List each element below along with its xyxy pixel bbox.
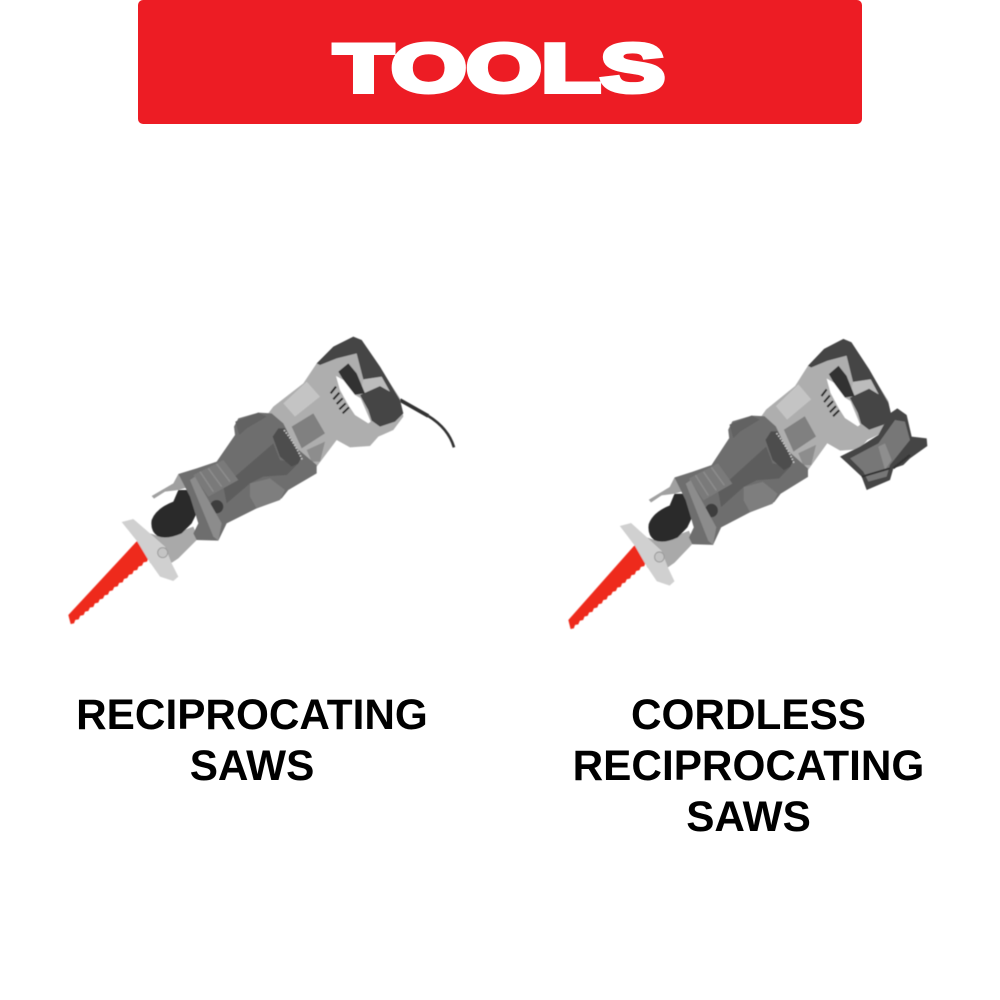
icon: corded reciprocating saw (68, 337, 454, 624)
icon: battery pack (840, 408, 927, 490)
icon: cordless reciprocating saw (568, 339, 927, 629)
label: cordless reciprocating saws (573, 691, 924, 840)
title banner (138, 0, 862, 124)
title: TOOLS (334, 30, 665, 106)
label: cordless reciprocating saws: CORDLESS (631, 691, 866, 738)
label: reciprocating saws: RECIPROCATING (76, 691, 428, 738)
label: cordless reciprocating saws: RECIPROCATING (573, 742, 924, 789)
label: reciprocating saws (76, 691, 428, 789)
label: cordless reciprocating saws: SAWS (686, 793, 811, 840)
label: reciprocating saws: SAWS (190, 742, 314, 789)
